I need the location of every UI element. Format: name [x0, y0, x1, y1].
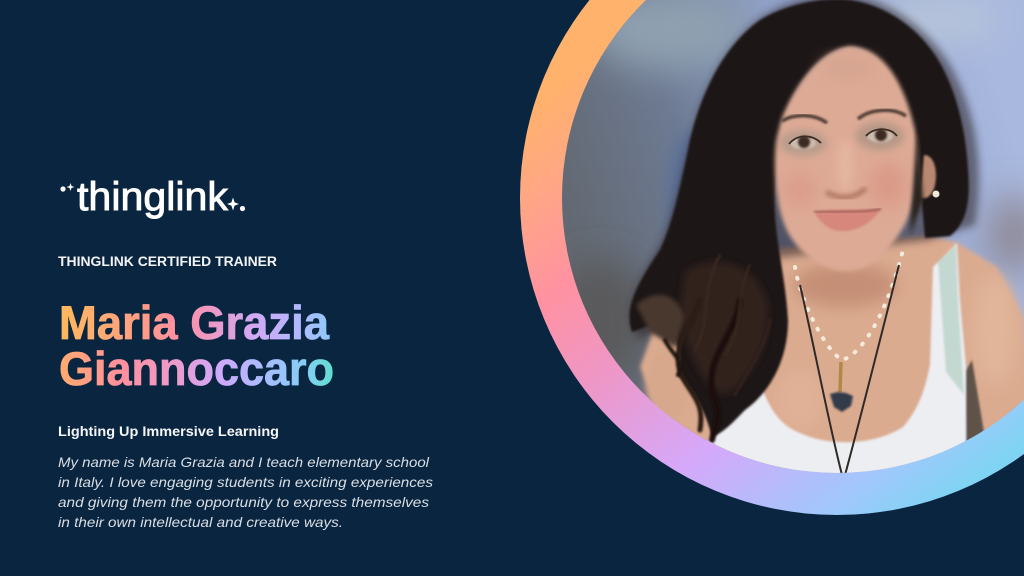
trainer name: Giannoccaro — [59, 343, 334, 396]
bio paragraph: My name is Maria Grazia and I teach elementary school — [58, 454, 430, 470]
hair — [630, 0, 979, 440]
left text column — [58, 175, 433, 530]
portrait photo — [550, 0, 1024, 480]
gradient ring — [520, 0, 1024, 515]
lighter brown lengths — [680, 262, 768, 395]
black lanyard — [800, 265, 899, 475]
bio paragraph: in their own intellectual and creative ways. — [58, 514, 343, 530]
bio paragraph: in Italy. I love engaging students in exciting experiences — [58, 474, 433, 490]
tagline: Lighting Up Immersive Learning — [58, 424, 279, 439]
bio paragraph — [58, 454, 433, 530]
pearl necklace — [795, 250, 903, 360]
wall backdrop — [550, 0, 1024, 480]
curl strands — [665, 255, 770, 440]
soft halo of flyaway hair — [632, 0, 979, 340]
main hair mass — [630, 0, 969, 437]
face — [775, 46, 936, 271]
certification heading: THINGLINK CERTIFIED TRAINER — [58, 254, 277, 269]
bio paragraph: and giving them the opportunity to express themselves — [58, 494, 429, 510]
shadow gap under arm — [965, 360, 984, 444]
white tank top — [700, 243, 966, 480]
trainer name: Maria Grazia — [59, 297, 330, 350]
pendant — [830, 362, 853, 412]
ThingLink logo: thinglink — [77, 175, 229, 219]
trainer name — [59, 297, 334, 396]
eyebrows, eyes, nose, mouth — [782, 110, 940, 231]
arms and chest — [640, 235, 1024, 470]
